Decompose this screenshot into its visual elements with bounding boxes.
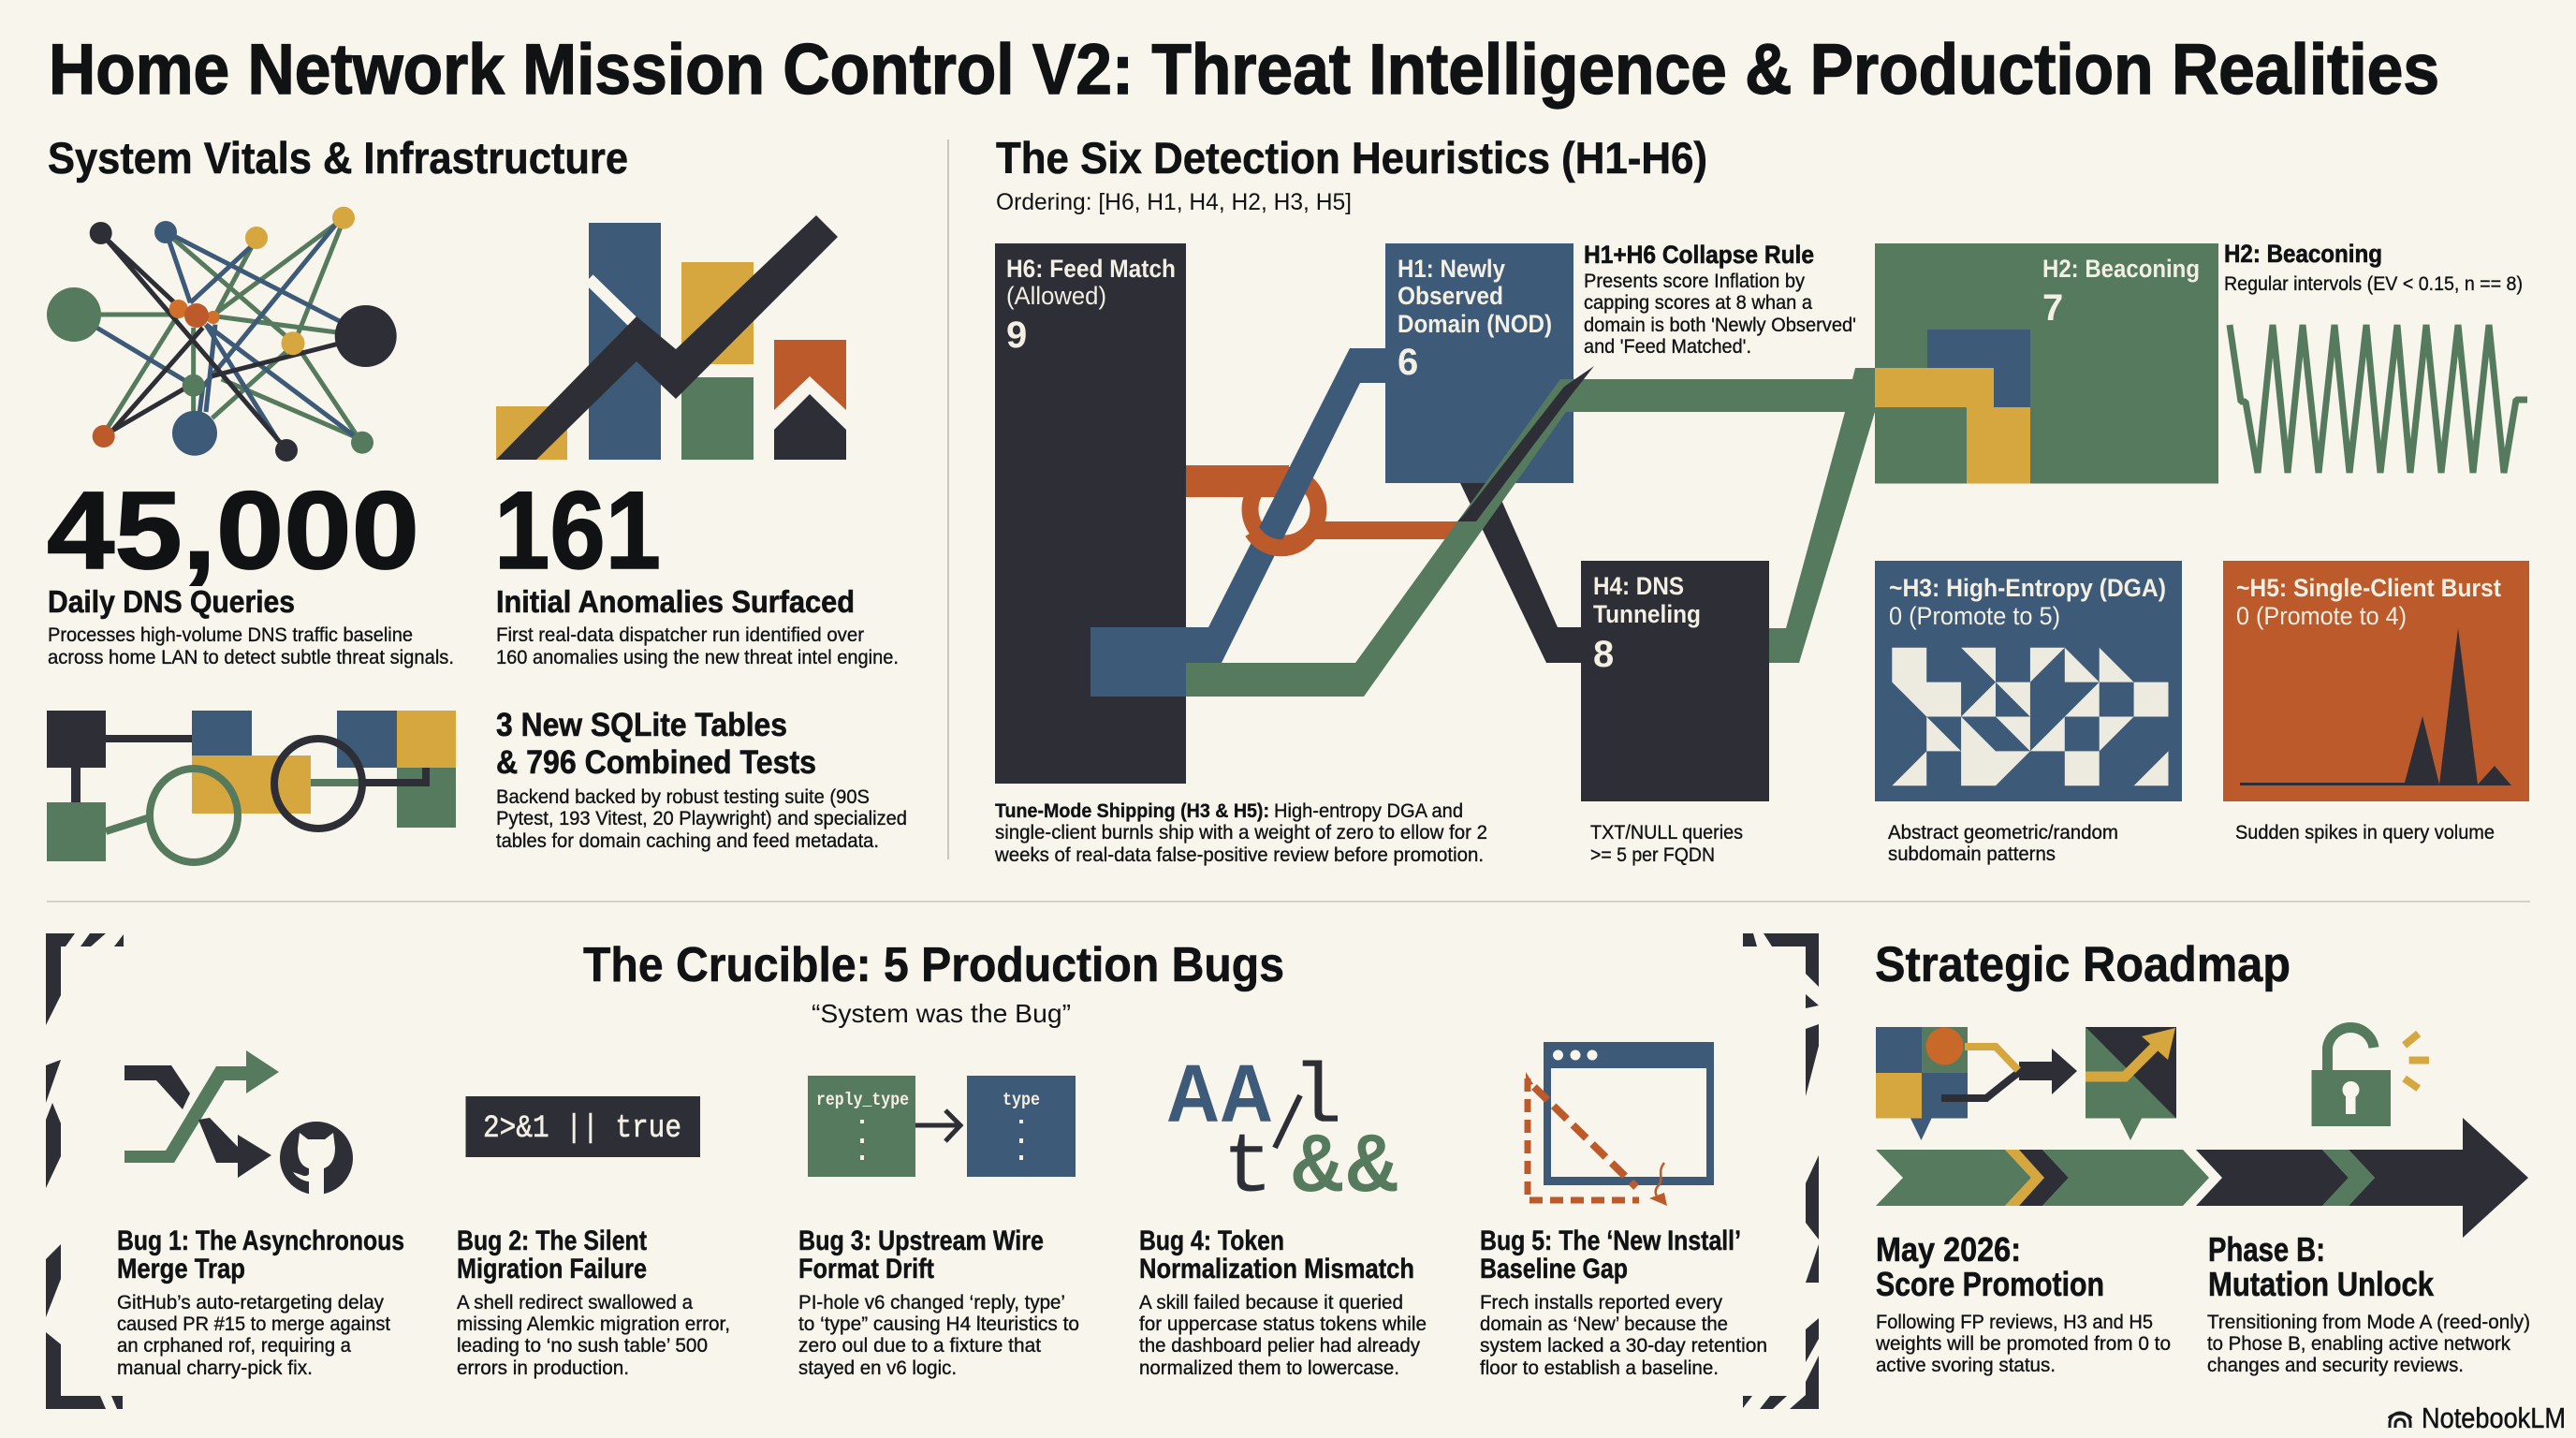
box: H6 feed match: 9	[1006, 315, 1027, 356]
caption: H4	[1590, 821, 1743, 866]
icon: wire format drift	[808, 1076, 1076, 1177]
bug 4: the dashboard pelier had already	[1139, 1334, 1420, 1357]
bug 1: caused PR #15 to merge against	[117, 1313, 390, 1335]
box: H6 feed match: (Allowed)	[1006, 282, 1106, 310]
icon: wire format drift: type	[1003, 1090, 1040, 1110]
callout: H1+H6 collapse rule: and 'Feed Matched'.	[1584, 335, 1751, 358]
milestone: phase B mutation unlock	[2207, 1230, 2530, 1376]
subtitle: “System was the Bug”	[812, 999, 1071, 1028]
bug 4	[1139, 1049, 1427, 1379]
text: sqlite tables and tests: tables for domain caching and feed metadata.	[496, 829, 879, 852]
flow connectors between heuristics	[1090, 348, 1875, 697]
heading: system vitals: System Vitals & Infrastructure	[48, 133, 628, 183]
bug 1: Bug 1: The Asynchronous	[117, 1225, 404, 1256]
text: tune-mode shipping	[994, 800, 1487, 866]
text: tune-mode shipping: single-client burnls ship with a weight of zero to ellow for 2	[995, 821, 1487, 844]
arrow: roadmap timeline	[1876, 1118, 2528, 1238]
bug 5: Frech installs reported every	[1480, 1291, 1722, 1313]
bug 5: Bug 5: The ‘New Install’	[1480, 1225, 1741, 1256]
icon: token case glyphs	[1166, 1049, 1399, 1217]
bug 4: Normalization Mismatch	[1139, 1254, 1414, 1284]
icon: network graph	[47, 207, 397, 462]
heading: strategic roadmap: Strategic Roadmap	[1875, 937, 2291, 992]
bug 4: for uppercase status tokens while	[1139, 1313, 1427, 1335]
text: sqlite tables and tests: & 796 Combined Tests	[496, 744, 816, 781]
icon: token case glyphs: &&	[1290, 1118, 1399, 1209]
box: H4 DNS tunneling: H4: DNS	[1593, 572, 1684, 600]
bug 3: Format Drift	[798, 1254, 934, 1284]
milestone: phase B mutation unlock: Mutation Unlock	[2208, 1265, 2435, 1303]
bug 5: floor to establish a baseline.	[1480, 1357, 1719, 1379]
text: ordering: Ordering: [H6, H1, H4, H2, H3, H5]	[996, 189, 1352, 215]
milestone: phase B mutation unlock: to Phose B, enabling active network	[2207, 1332, 2510, 1355]
caption: H4: TXT/NULL queries	[1590, 821, 1743, 844]
caption: H5: Sudden spikes in query volume	[2235, 821, 2495, 844]
caption: H3	[1888, 821, 2118, 865]
box: H2 beaconing: H2: Beaconing	[2042, 255, 2200, 283]
panel: strategic roadmap	[1875, 937, 2530, 1376]
icon: promotion arrow tile	[2086, 1027, 2176, 1140]
bug 2: Migration Failure	[457, 1254, 647, 1284]
panel: system vitals	[47, 133, 907, 862]
stat: 45,000 daily DNS queries: 45,000	[47, 469, 419, 593]
text: tune-mode shipping: weeks of real-data false-positive review before promotion.	[994, 844, 1484, 866]
milestone: phase B mutation unlock: Trensitioning from Mode A (reed-only)	[2207, 1311, 2530, 1333]
bug 2: missing Alemkic migration error,	[457, 1313, 730, 1335]
box: H3 high-entropy DGA: 0 (Promote to 5)	[1889, 602, 2060, 630]
box: H5 single-client burst: 0 (Promote to 4)	[2236, 602, 2407, 630]
icon: geometric subdomain mosaic	[1892, 648, 2168, 785]
box: H5 single-client burst: ~H5: Single-Client Burst	[2236, 574, 2501, 602]
stat: 45,000 daily DNS queries	[47, 469, 454, 668]
box: H1 newly observed domain: Observed	[1398, 282, 1503, 310]
panel: the crucible	[46, 933, 1819, 1409]
icon: wire format drift: reply_type	[816, 1090, 909, 1110]
icon: score promotion blocks	[1876, 1027, 2077, 1140]
chart: beaconing wave: Regular intervols (EV < 0.15, n == 8)	[2224, 272, 2523, 295]
milestone: may 2026 score promotion: Following FP reviews, H3 and H5	[1876, 1311, 2153, 1333]
callout: H1+H6 collapse rule: capping scores at 8 whan a	[1584, 291, 1812, 314]
bug 1: GitHub’s auto-retargeting delay	[117, 1291, 384, 1313]
bug 5: domain as ‘New’ because the	[1480, 1313, 1728, 1335]
bug 4: A skill failed because it queried	[1139, 1291, 1403, 1313]
box: H6 feed match: H6: Feed Match	[1006, 255, 1176, 283]
stat: 161 initial anomalies: First real-data dispatcher run identified over	[496, 624, 864, 646]
bug 3: stayed en v6 logic.	[798, 1357, 957, 1379]
bug 1: an crphaned rof, requiring a	[117, 1334, 351, 1357]
bug 5: system lacked a 30-day retention	[1480, 1334, 1767, 1357]
stat: 45,000 daily DNS queries: Daily DNS Queries	[48, 584, 295, 619]
bug 2: leading to ‘no sush table’ 500	[457, 1334, 708, 1357]
box: H3 high-entropy DGA: ~H3: High-Entropy (DGA)	[1889, 574, 2166, 602]
stat: 161 initial anomalies: Initial Anomalies Surfaced	[496, 584, 855, 619]
icon: database tables	[47, 711, 456, 862]
milestone: may 2026 score promotion: weights will be promoted from 0 to	[1875, 1332, 2171, 1355]
icon: shell command	[466, 1096, 700, 1157]
bug 4: Bug 4: Token	[1139, 1225, 1284, 1256]
caption: H4: >= 5 per FQDN	[1590, 844, 1715, 866]
box: H2 beaconing: 7	[2042, 287, 2063, 329]
box: H5 single-client burst	[2223, 561, 2529, 801]
bug 1: manual charry-pick fix.	[117, 1357, 313, 1379]
bug 1	[117, 1050, 404, 1379]
bug 3: zero oul due to a fixture that	[798, 1334, 1041, 1357]
text: sqlite tables and tests: Pytest, 193 Vitest, 20 Playwright) and specialized	[496, 807, 907, 829]
stat: 161 initial anomalies: 160 anomalies using the new threat intel engine.	[496, 646, 899, 668]
bug 2: A shell redirect swallowed a	[457, 1291, 693, 1313]
stat: 161 initial anomalies: 161	[494, 469, 661, 593]
milestone: may 2026 score promotion: active svoring status.	[1876, 1354, 2056, 1376]
milestone: phase B mutation unlock: changes and security reviews.	[2207, 1354, 2464, 1376]
milestone: may 2026 score promotion: May 2026:	[1876, 1230, 2021, 1269]
callout: H1+H6 collapse rule: Presents score Inflation by	[1584, 270, 1805, 292]
icon: token case glyphs: t	[1222, 1122, 1273, 1217]
text: tune-mode shipping: Tune-Mode Shipping (H3 & H5):	[995, 800, 1269, 822]
text: sqlite tables and tests: Backend backed by robust testing suite (90S	[496, 785, 870, 808]
box: H1 newly observed domain: 6	[1398, 342, 1418, 383]
caption: H3: Abstract geometric/random	[1888, 821, 2118, 844]
icon: open padlock	[2312, 1028, 2429, 1126]
caption: H3: subdomain patterns	[1888, 843, 2056, 865]
box: H1 newly observed domain: Domain (NOD)	[1398, 310, 1552, 338]
icon: merge arrows and github	[124, 1050, 353, 1196]
stat: 45,000 daily DNS queries: across home LAN to detect subtle threat signals.	[48, 646, 454, 668]
panel: six detection heuristics	[994, 133, 2529, 866]
stat: 161 initial anomalies	[494, 469, 899, 668]
icon: token case glyphs: AA	[1166, 1049, 1273, 1139]
bug 1: Merge Trap	[117, 1254, 245, 1284]
text: tune-mode shipping: High-entropy DGA and	[1274, 800, 1463, 822]
text: sqlite tables and tests	[496, 707, 907, 852]
icon: browser window with dashed baseline	[1526, 1042, 1714, 1206]
bug 5: Baseline Gap	[1480, 1254, 1628, 1284]
box: H2 beaconing	[1875, 243, 2218, 483]
milestone: phase B mutation unlock: Phase B:	[2208, 1230, 2325, 1269]
callout: H1+H6 collapse rule: domain is both 'Newly Observed'	[1584, 314, 1856, 336]
bug 4: normalized them to lowercase.	[1139, 1357, 1399, 1379]
bug 2	[457, 1096, 730, 1379]
chart: query volume spike	[2240, 628, 2511, 785]
heading: the crucible: The Crucible: 5 Production Bugs	[583, 938, 1284, 992]
frame: fragmented bracket	[46, 933, 1819, 1409]
icon: token case glyphs: l	[1292, 1052, 1342, 1148]
box: H1 newly observed domain	[1385, 243, 1573, 483]
box: H4 DNS tunneling: 8	[1593, 634, 1614, 675]
bug 2: Bug 2: The Silent	[457, 1225, 647, 1256]
heading: six detection heuristics: The Six Detection Heuristics (H1-H6)	[996, 133, 1707, 183]
bug 2: errors in production.	[457, 1357, 629, 1379]
box: H4 DNS tunneling: Tunneling	[1593, 600, 1701, 628]
milestone: may 2026 score promotion	[1875, 1230, 2171, 1376]
text: sqlite tables and tests: 3 New SQLite Tables	[496, 707, 787, 743]
bug 3: PI-hole v6 changed ‘reply, type’	[798, 1291, 1065, 1313]
box: H6 feed match	[995, 243, 1186, 784]
box: H1 newly observed domain: H1: Newly	[1398, 255, 1505, 283]
bug 5	[1480, 1042, 1767, 1379]
callout: H1+H6 collapse rule: H1+H6 Collapse Rule	[1584, 241, 1814, 269]
icon: anomaly bar chart	[496, 215, 846, 460]
chart: beaconing wave: H2: Beaconing	[2224, 240, 2382, 268]
box: H4 DNS tunneling	[1581, 561, 1769, 801]
callout: H1+H6 collapse rule	[1584, 241, 1856, 358]
bug 3: to ‘type” causing H4 lteuristics to	[798, 1313, 1079, 1335]
milestone: may 2026 score promotion: Score Promotion	[1876, 1265, 2104, 1303]
bug 3: Bug 3: Upstream Wire	[798, 1225, 1044, 1256]
icon: shell command: 2>&1 || true	[483, 1111, 681, 1147]
chart: beaconing wave	[2224, 240, 2527, 473]
bug 3	[798, 1076, 1079, 1379]
box: H3 high-entropy DGA	[1875, 561, 2182, 801]
stat: 45,000 daily DNS queries: Processes high-volume DNS traffic baseline	[48, 624, 413, 646]
